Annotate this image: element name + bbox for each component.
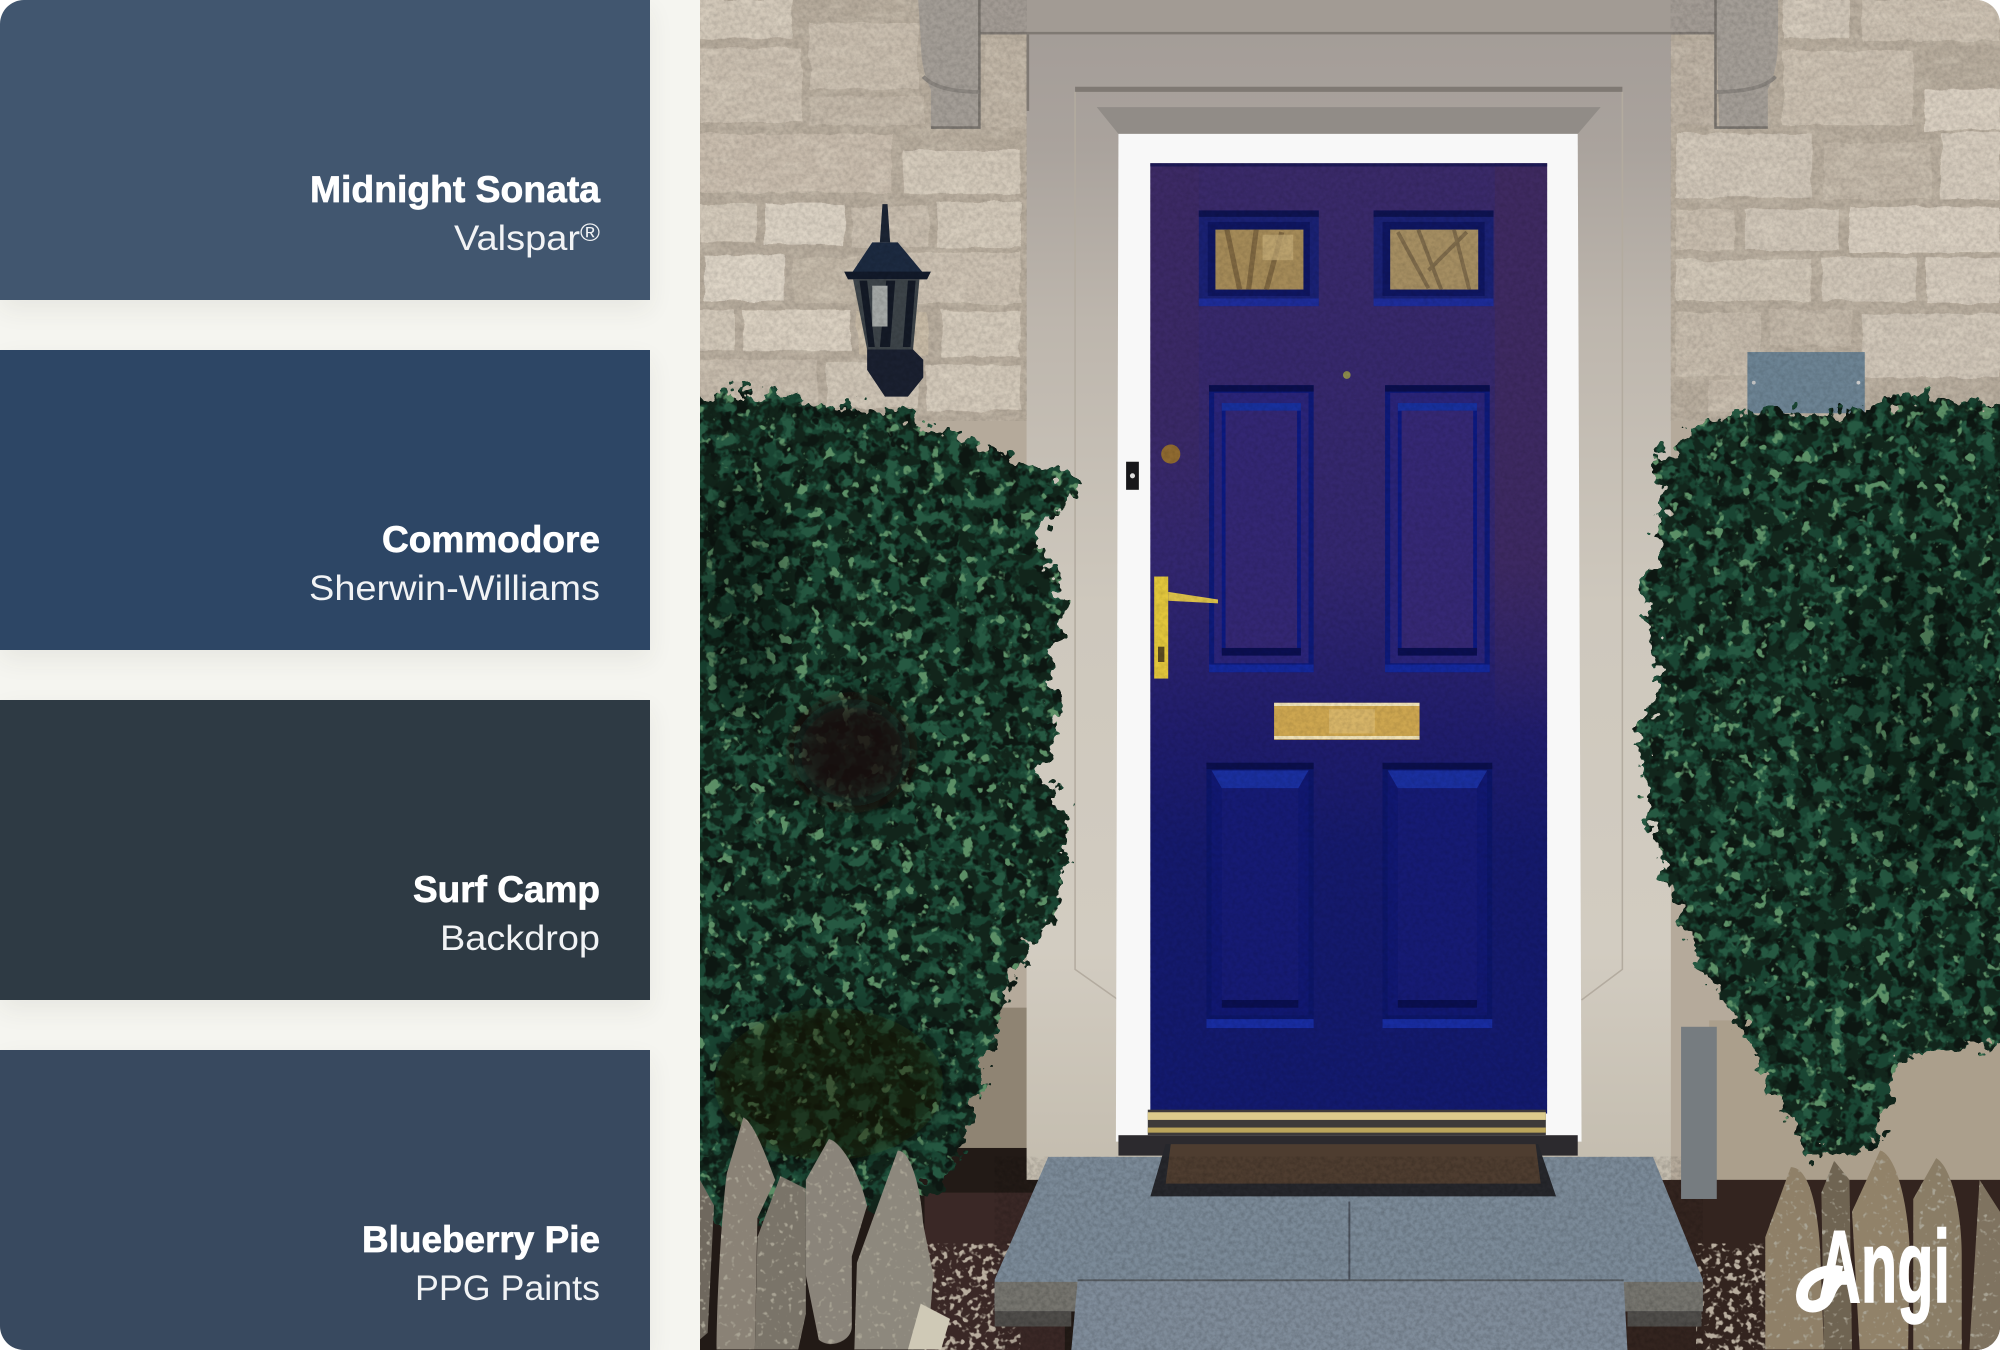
brand: PPG Paints: PPG Paints [415, 1269, 600, 1308]
door surround [1027, 34, 1671, 1180]
gravel pebbles: right [1696, 1244, 1773, 1350]
wall mottling: right [1671, 0, 2000, 421]
wall lantern [844, 204, 931, 397]
panel: Midnight Sonata swatch [0, 0, 650, 300]
door panel: lower left [1206, 763, 1314, 1028]
panel: Commodore swatch [0, 350, 650, 650]
panel: Surf Camp swatch [0, 700, 650, 1000]
stone step: upper slab [995, 1157, 1703, 1311]
brass threshold [1148, 1110, 1546, 1135]
left hedge [676, 389, 1084, 1231]
door sill [1118, 1135, 1578, 1156]
door window: left [1199, 210, 1319, 306]
wall grain: right [1671, 0, 2000, 421]
photo: navy front door with stone surround [700, 0, 2000, 1350]
door panel: lower right [1383, 763, 1492, 1028]
brand: Valspar: Valspar [454, 219, 570, 258]
door grain [1150, 163, 1547, 1114]
color name: Midnight Sonata: Midnight Sonata [310, 169, 600, 210]
door handle [1154, 577, 1218, 679]
doormat [1150, 1144, 1556, 1196]
stone blocks: right wall [1672, 0, 2000, 411]
color name: Blueberry Pie: Blueberry Pie [362, 1219, 600, 1260]
door window: right [1374, 210, 1494, 306]
doorbell [1126, 462, 1139, 490]
white door frame [1116, 134, 1582, 1142]
gravel pebbles: left [925, 1244, 1020, 1350]
brand: Backdrop: Backdrop [440, 919, 600, 958]
step granite grain [995, 1157, 1703, 1350]
wall mottling: left [700, 0, 1027, 421]
brand: Sherwin-Williams: Sherwin-Williams [309, 569, 600, 608]
stone blocks: left wall [700, 0, 1025, 411]
panel: Blueberry Pie swatch [0, 1050, 650, 1350]
color name: Commodore: Commodore [382, 519, 600, 560]
thumb turn [1161, 445, 1180, 464]
pale rock at foot of left stones [908, 1304, 950, 1349]
door panel: upper left [1209, 385, 1314, 672]
door panel: upper right [1385, 385, 1490, 672]
stone step: lower slab [995, 1279, 1701, 1350]
drainpipe [1681, 1027, 1717, 1199]
color name: Surf Camp: Surf Camp [413, 869, 600, 910]
brand: Valspar: ® [580, 219, 601, 247]
hedge shadows [700, 472, 1977, 1161]
wall grain: left [700, 0, 1027, 421]
right hedge [1639, 395, 2000, 1154]
ground and gravel [700, 1148, 2000, 1350]
wall plaque [1747, 352, 1865, 413]
door leaf [1150, 163, 1547, 1114]
letterbox [1274, 703, 1420, 740]
corbel: right [1716, 0, 1778, 128]
peephole [1343, 371, 1351, 379]
lintel over the door surround [979, 0, 1716, 34]
garden stones: right [1765, 1151, 2000, 1349]
corbel: left [918, 0, 979, 128]
garden stones: left [700, 1117, 933, 1349]
lower wall beneath the hedges [944, 1008, 2000, 1186]
stone wall base [700, 0, 2000, 1350]
